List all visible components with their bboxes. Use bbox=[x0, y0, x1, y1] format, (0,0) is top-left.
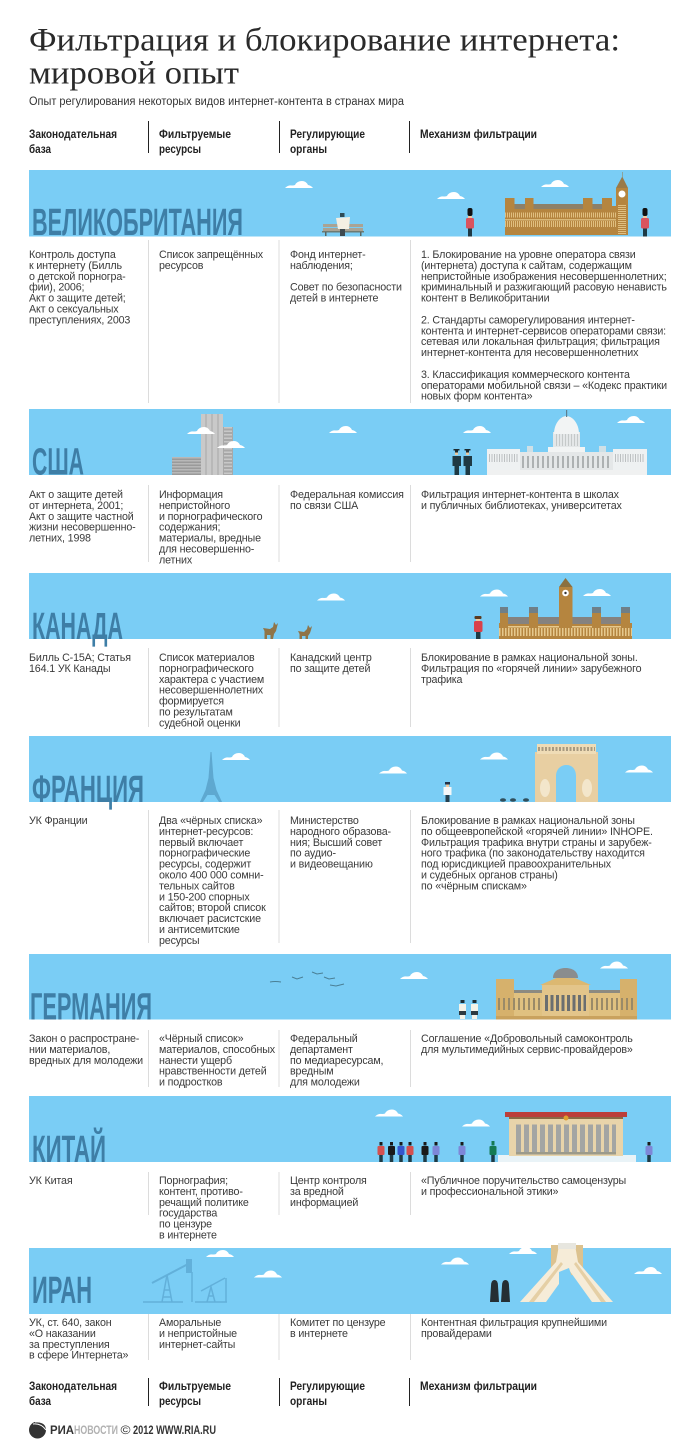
text: regulators: народного образова- bbox=[290, 826, 392, 838]
text: filtering mechanism: ного трафика (по законодательству находится bbox=[421, 848, 645, 860]
dividers bbox=[148, 240, 410, 403]
text: filtered resources: несовершеннолетних bbox=[159, 685, 264, 697]
text: legal basis: за преступления bbox=[29, 1339, 110, 1351]
footer logo and copyright bbox=[29, 1422, 216, 1438]
text: filtering mechanism: Блокирование в рамках национальной зоны bbox=[421, 815, 635, 827]
icon: Capitol bbox=[487, 410, 647, 475]
text: filtering mechanism: и судебных органов страны) bbox=[421, 870, 558, 882]
text: filtered resources: Список материалов bbox=[159, 652, 255, 664]
text: regulators: Канадский центр bbox=[290, 652, 372, 664]
footer logo and copyright: НОВОСТИ bbox=[74, 1423, 118, 1437]
title: Фильтрация и блокирование интернета: bbox=[29, 22, 620, 58]
text: filtered resources: характера с участием bbox=[159, 674, 264, 686]
top column headers: Законодательная bbox=[29, 129, 117, 141]
text: filtered resources: материалы, вредные bbox=[159, 533, 261, 545]
bottom column headers bbox=[29, 1378, 537, 1408]
text: regulators: Министерство bbox=[290, 815, 359, 827]
text: filtered resources: и 150-200 спорных bbox=[159, 891, 250, 903]
country name: КАНАДА bbox=[32, 606, 123, 648]
text: filtering mechanism: по общеевропейской «горячей линии» INHOPE. bbox=[421, 826, 653, 838]
text: legal basis: УК Китая bbox=[29, 1175, 73, 1187]
text: filtered resources: сайтов; второй список bbox=[159, 902, 266, 914]
text: filtered resources: интернет-ресурсов: bbox=[159, 826, 253, 838]
text: filtered resources: первый включает bbox=[159, 837, 243, 849]
text: filtered resources: порнографические bbox=[159, 848, 250, 860]
footer logo and copyright: © bbox=[120, 1423, 131, 1437]
text: legal basis: в сфере Интернета» bbox=[29, 1350, 128, 1362]
dividers bbox=[148, 1172, 410, 1215]
text: legal basis: Акт о сексуальных bbox=[29, 304, 119, 316]
icon: Eiffel tower bbox=[200, 752, 222, 802]
text: filtering mechanism: контент в Великобритании bbox=[421, 293, 550, 305]
text: filtered resources: Аморальные bbox=[159, 1317, 221, 1329]
text: regulators: Фонд интернет- bbox=[290, 249, 366, 261]
sky band bbox=[29, 954, 671, 1020]
text: regulators: по медиаресурсам, bbox=[290, 1055, 384, 1067]
text: filtered resources: для несовершенно- bbox=[159, 544, 255, 556]
clouds bbox=[206, 1247, 662, 1278]
text: legal basis: нии материалов, bbox=[29, 1044, 110, 1056]
icon: birds bbox=[270, 972, 344, 986]
text: legal basis: вредных для молодежи bbox=[29, 1055, 143, 1067]
text: regulators: по защите детей bbox=[290, 663, 370, 675]
text: filtering mechanism: сетевая или локальная фильтрация; фильтрация bbox=[421, 336, 660, 348]
text: legal basis: Акт о защите частной bbox=[29, 511, 134, 523]
text: legal basis: «О наказании bbox=[29, 1328, 96, 1340]
clouds bbox=[222, 752, 653, 774]
text: legal basis: жизни несовершенно- bbox=[29, 522, 136, 534]
top column headers: база bbox=[29, 144, 52, 156]
text: regulators: ния; Высший совет bbox=[290, 837, 382, 849]
text: filtering mechanism: для мультимедийных сервис-провайдеров» bbox=[421, 1044, 633, 1056]
footer logo and copyright: 2012 WWW.RIA.RU bbox=[133, 1423, 216, 1437]
icon: gendarme bbox=[444, 782, 452, 802]
text: filtered resources: Информация bbox=[159, 489, 223, 501]
country name: ВЕЛИКОБРИТАНИЯ bbox=[32, 202, 243, 244]
text: legal basis: о детской порногра- bbox=[29, 271, 126, 283]
text: legal basis: к интернету (Билль bbox=[29, 260, 122, 272]
panel: China bbox=[29, 1096, 671, 1242]
sky band bbox=[29, 409, 671, 475]
text: filtering mechanism: Блокирование в рамках национальной зоны. bbox=[421, 652, 638, 664]
text: regulators: детей в интернете bbox=[290, 293, 379, 305]
text: regulators: информацией bbox=[290, 1197, 358, 1209]
text: filtering mechanism: «Публичное поручительство самоцензуры bbox=[421, 1175, 626, 1187]
text: regulators: наблюдения; bbox=[290, 260, 353, 272]
icon: man on bench with newspaper bbox=[322, 213, 364, 236]
text: filtered resources: содержания; bbox=[159, 522, 221, 534]
text: regulators: Комитет по цензуре bbox=[290, 1317, 386, 1329]
text: filtering mechanism: 2. Стандарты саморегулирования интернет- bbox=[421, 314, 635, 326]
dividers bbox=[148, 485, 410, 562]
text: filtered resources: государства bbox=[159, 1208, 217, 1220]
text: filtered resources: судебной оценки bbox=[159, 717, 241, 729]
text: regulators: департамент bbox=[290, 1044, 353, 1056]
icon: two men in suits bbox=[452, 449, 472, 475]
text: filtered resources: нанести ущерб bbox=[159, 1055, 232, 1067]
clouds bbox=[375, 1110, 490, 1126]
text: filtered resources: Два «чёрных списка» bbox=[159, 815, 263, 827]
text: regulators: и видеовещанию bbox=[290, 859, 373, 871]
country name: ГЕРМАНИЯ bbox=[30, 986, 152, 1028]
icon: Canadian Parliament bbox=[499, 578, 632, 639]
text: legal basis: Акт о защите детей bbox=[29, 489, 123, 501]
text: regulators: Совет по безопасности bbox=[290, 282, 402, 294]
bottom column headers: Регулирующие bbox=[290, 1381, 365, 1393]
dividers bbox=[148, 1314, 410, 1360]
text: filtered resources: тельных сайтов bbox=[159, 880, 235, 892]
panel: Germany bbox=[29, 954, 671, 1089]
text: legal basis: Акт о защите детей; bbox=[29, 293, 126, 305]
text: legal basis: 164.1 УК Канады bbox=[29, 663, 110, 675]
text: filtering mechanism: Контентная фильтрация крупнейшими bbox=[421, 1317, 607, 1329]
text: filtering mechanism: под юрисдикцией правоохранительных bbox=[421, 859, 612, 871]
text: legal basis: преступлениях, 2003 bbox=[29, 314, 130, 326]
icon: Great Hall of the People bbox=[498, 1112, 636, 1162]
icon: two women in chadors bbox=[490, 1280, 510, 1302]
country name: ИРАН bbox=[32, 1270, 92, 1312]
text: filtering mechanism: Фильтрация интернет-контента в школах bbox=[421, 489, 620, 501]
text: filtering mechanism: новых форм контента» bbox=[421, 391, 533, 403]
text: filtered resources: и подростков bbox=[159, 1077, 223, 1089]
dividers bbox=[148, 810, 410, 943]
icon: RIA globe logo bbox=[29, 1422, 46, 1438]
text: filtering mechanism: непристойные изображения несовершеннолетних; bbox=[421, 271, 667, 283]
text: legal basis: УК, ст. 640, закон bbox=[29, 1317, 112, 1329]
icon: two children bbox=[459, 1000, 478, 1019]
text: filtered resources: речащий политике bbox=[159, 1197, 249, 1209]
text: filtered resources: непристойного bbox=[159, 500, 230, 512]
top column headers: Фильтруемые bbox=[159, 129, 231, 141]
dividers bbox=[148, 1030, 410, 1087]
panel: USA bbox=[29, 409, 671, 566]
top column headers: Механизм фильтрации bbox=[420, 129, 537, 141]
text: regulators: вредным bbox=[290, 1066, 333, 1078]
text: filtered resources: по результатам bbox=[159, 706, 233, 718]
text: filtered resources: ресурсы, содержит bbox=[159, 859, 251, 871]
text: filtered resources: порнографического bbox=[159, 663, 254, 675]
text: filtered resources: формируется bbox=[159, 696, 224, 708]
text: regulators: Федеральный bbox=[290, 1033, 358, 1045]
country name: КИТАЙ bbox=[32, 1126, 106, 1171]
text: filtered resources: по цензуре bbox=[159, 1219, 212, 1231]
text: filtering mechanism: 1. Блокирование на уровне оператора связи bbox=[421, 249, 636, 261]
title bbox=[29, 22, 620, 92]
text: filtered resources: «Чёрный список» bbox=[159, 1033, 244, 1045]
dividers bbox=[148, 648, 410, 727]
sky band bbox=[29, 170, 671, 236]
clouds bbox=[317, 589, 611, 600]
text: filtered resources: ресурсов bbox=[159, 260, 204, 272]
icon: royal guard bbox=[466, 208, 474, 236]
text: regulators: Центр контроля bbox=[290, 1175, 367, 1187]
text: filtering mechanism: 3. Классификация коммерческого контента bbox=[421, 369, 630, 381]
text: filtered resources: летних bbox=[159, 554, 193, 566]
sky band bbox=[29, 736, 671, 802]
text: filtering mechanism: и публичных библиотеках, университетах bbox=[421, 500, 623, 512]
text: filtering mechanism: Фильтрация по «горячей линии» зарубежного bbox=[421, 663, 642, 675]
text: filtering mechanism: и профессиональной этики» bbox=[421, 1186, 559, 1198]
text: regulators: по аудио- bbox=[290, 848, 336, 860]
text: regulators: Федеральная комиссия bbox=[290, 489, 404, 501]
icon: Arc de Triomphe bbox=[535, 744, 598, 802]
text: filtered resources: около 400 000 сомни- bbox=[159, 870, 264, 882]
clouds bbox=[187, 416, 645, 448]
bottom column headers: ресурсы bbox=[159, 1396, 201, 1408]
icon: deer bbox=[263, 622, 312, 639]
bottom column headers: Механизм фильтрации bbox=[420, 1381, 537, 1393]
icon: Palace of Westminster bbox=[505, 172, 628, 235]
bottom column headers: Фильтруемые bbox=[159, 1381, 231, 1393]
panel: Canada bbox=[29, 573, 671, 729]
text: regulators: по связи США bbox=[290, 500, 359, 512]
text: filtered resources: ресурсы bbox=[159, 935, 199, 947]
clouds bbox=[400, 962, 628, 979]
text: legal basis: УК Франции bbox=[29, 815, 88, 827]
text: regulators: в интернете bbox=[290, 1328, 348, 1340]
bottom column headers: органы bbox=[290, 1396, 327, 1408]
text: legal basis: Контроль доступа bbox=[29, 249, 116, 261]
text: filtered resources: нравственности детей bbox=[159, 1066, 267, 1078]
country name: ФРАНЦИЯ bbox=[32, 769, 144, 811]
icon: royal guard bbox=[641, 208, 649, 236]
footer logo and copyright: РИА bbox=[50, 1423, 74, 1437]
text: filtered resources: Порнография; bbox=[159, 1175, 228, 1187]
text: filtered resources: интернет-сайты bbox=[159, 1339, 235, 1351]
top column headers: ресурсы bbox=[159, 144, 201, 156]
text: filtered resources: и антисемитские bbox=[159, 924, 240, 936]
sky band bbox=[29, 1096, 671, 1162]
text: filtering mechanism: криминальный и разжигающий расовую ненависть bbox=[421, 282, 667, 294]
text: filtered resources: и непристойные bbox=[159, 1328, 237, 1340]
text: filtering mechanism: Соглашение «Добровольный самоконтроль bbox=[421, 1033, 633, 1045]
bottom column headers: база bbox=[29, 1396, 52, 1408]
sky band bbox=[29, 1248, 671, 1314]
top column headers: органы bbox=[290, 144, 327, 156]
text: filtering mechanism: трафика bbox=[421, 674, 463, 686]
top column headers: Регулирующие bbox=[290, 129, 365, 141]
subtitle: Опыт регулирования некоторых видов интернет-контента в странах мира bbox=[29, 96, 405, 108]
panel: France bbox=[29, 736, 671, 947]
text: filtering mechanism: контента и интернет-сервисов операторами связи: bbox=[421, 325, 666, 337]
text: filtered resources: материалов, способных bbox=[159, 1044, 276, 1056]
title: мировой опыт bbox=[29, 56, 239, 92]
icon: crowd of people bbox=[378, 1141, 652, 1162]
text: legal basis: Билль С-15А; Статья bbox=[29, 652, 131, 664]
text: filtering mechanism: интернет-контента для несовершеннолетних bbox=[421, 347, 639, 359]
clouds bbox=[285, 180, 569, 199]
text: filtering mechanism: (интернета) доступа к сайтам, содержащим bbox=[421, 260, 632, 272]
text: filtered resources: контент, противо- bbox=[159, 1186, 243, 1198]
text: filtering mechanism: провайдерами bbox=[421, 1328, 492, 1340]
icon: skyscrapers bbox=[172, 414, 233, 475]
top column headers bbox=[29, 121, 537, 156]
text: regulators: за вредной bbox=[290, 1186, 344, 1198]
text: legal basis: Закон о распростране- bbox=[29, 1033, 140, 1045]
icon: Azadi tower bbox=[520, 1243, 613, 1302]
text: filtered resources: в интернете bbox=[159, 1230, 217, 1242]
bottom column headers: Законодательная bbox=[29, 1381, 117, 1393]
text: filtering mechanism: по «чёрным спискам» bbox=[421, 880, 527, 892]
text: filtered resources: включает расистские bbox=[159, 913, 261, 925]
text: filtered resources: Список запрещённых bbox=[159, 249, 264, 261]
text: filtering mechanism: Фильтрация трафика внутри страны и зарубеж- bbox=[421, 837, 652, 849]
text: regulators: для молодежи bbox=[290, 1077, 360, 1089]
text: legal basis: от интернета, 2001; bbox=[29, 500, 123, 512]
icon: Mountie bbox=[474, 616, 482, 639]
text: legal basis: летних, 1998 bbox=[29, 533, 91, 545]
icon: pigeons bbox=[500, 798, 529, 802]
text: filtering mechanism: операторами мобильной связи – «Кодекс практики bbox=[421, 380, 667, 392]
panel: United Kingdom bbox=[29, 170, 671, 403]
text: filtered resources: и порнографического bbox=[159, 511, 263, 523]
text: legal basis: фии), 2006; bbox=[29, 282, 85, 294]
panel: Iran bbox=[29, 1243, 671, 1362]
icon: oil pumps bbox=[143, 1259, 227, 1302]
country name: США bbox=[32, 442, 84, 484]
sky band bbox=[29, 573, 671, 639]
icon: Reichstag bbox=[496, 968, 637, 1020]
